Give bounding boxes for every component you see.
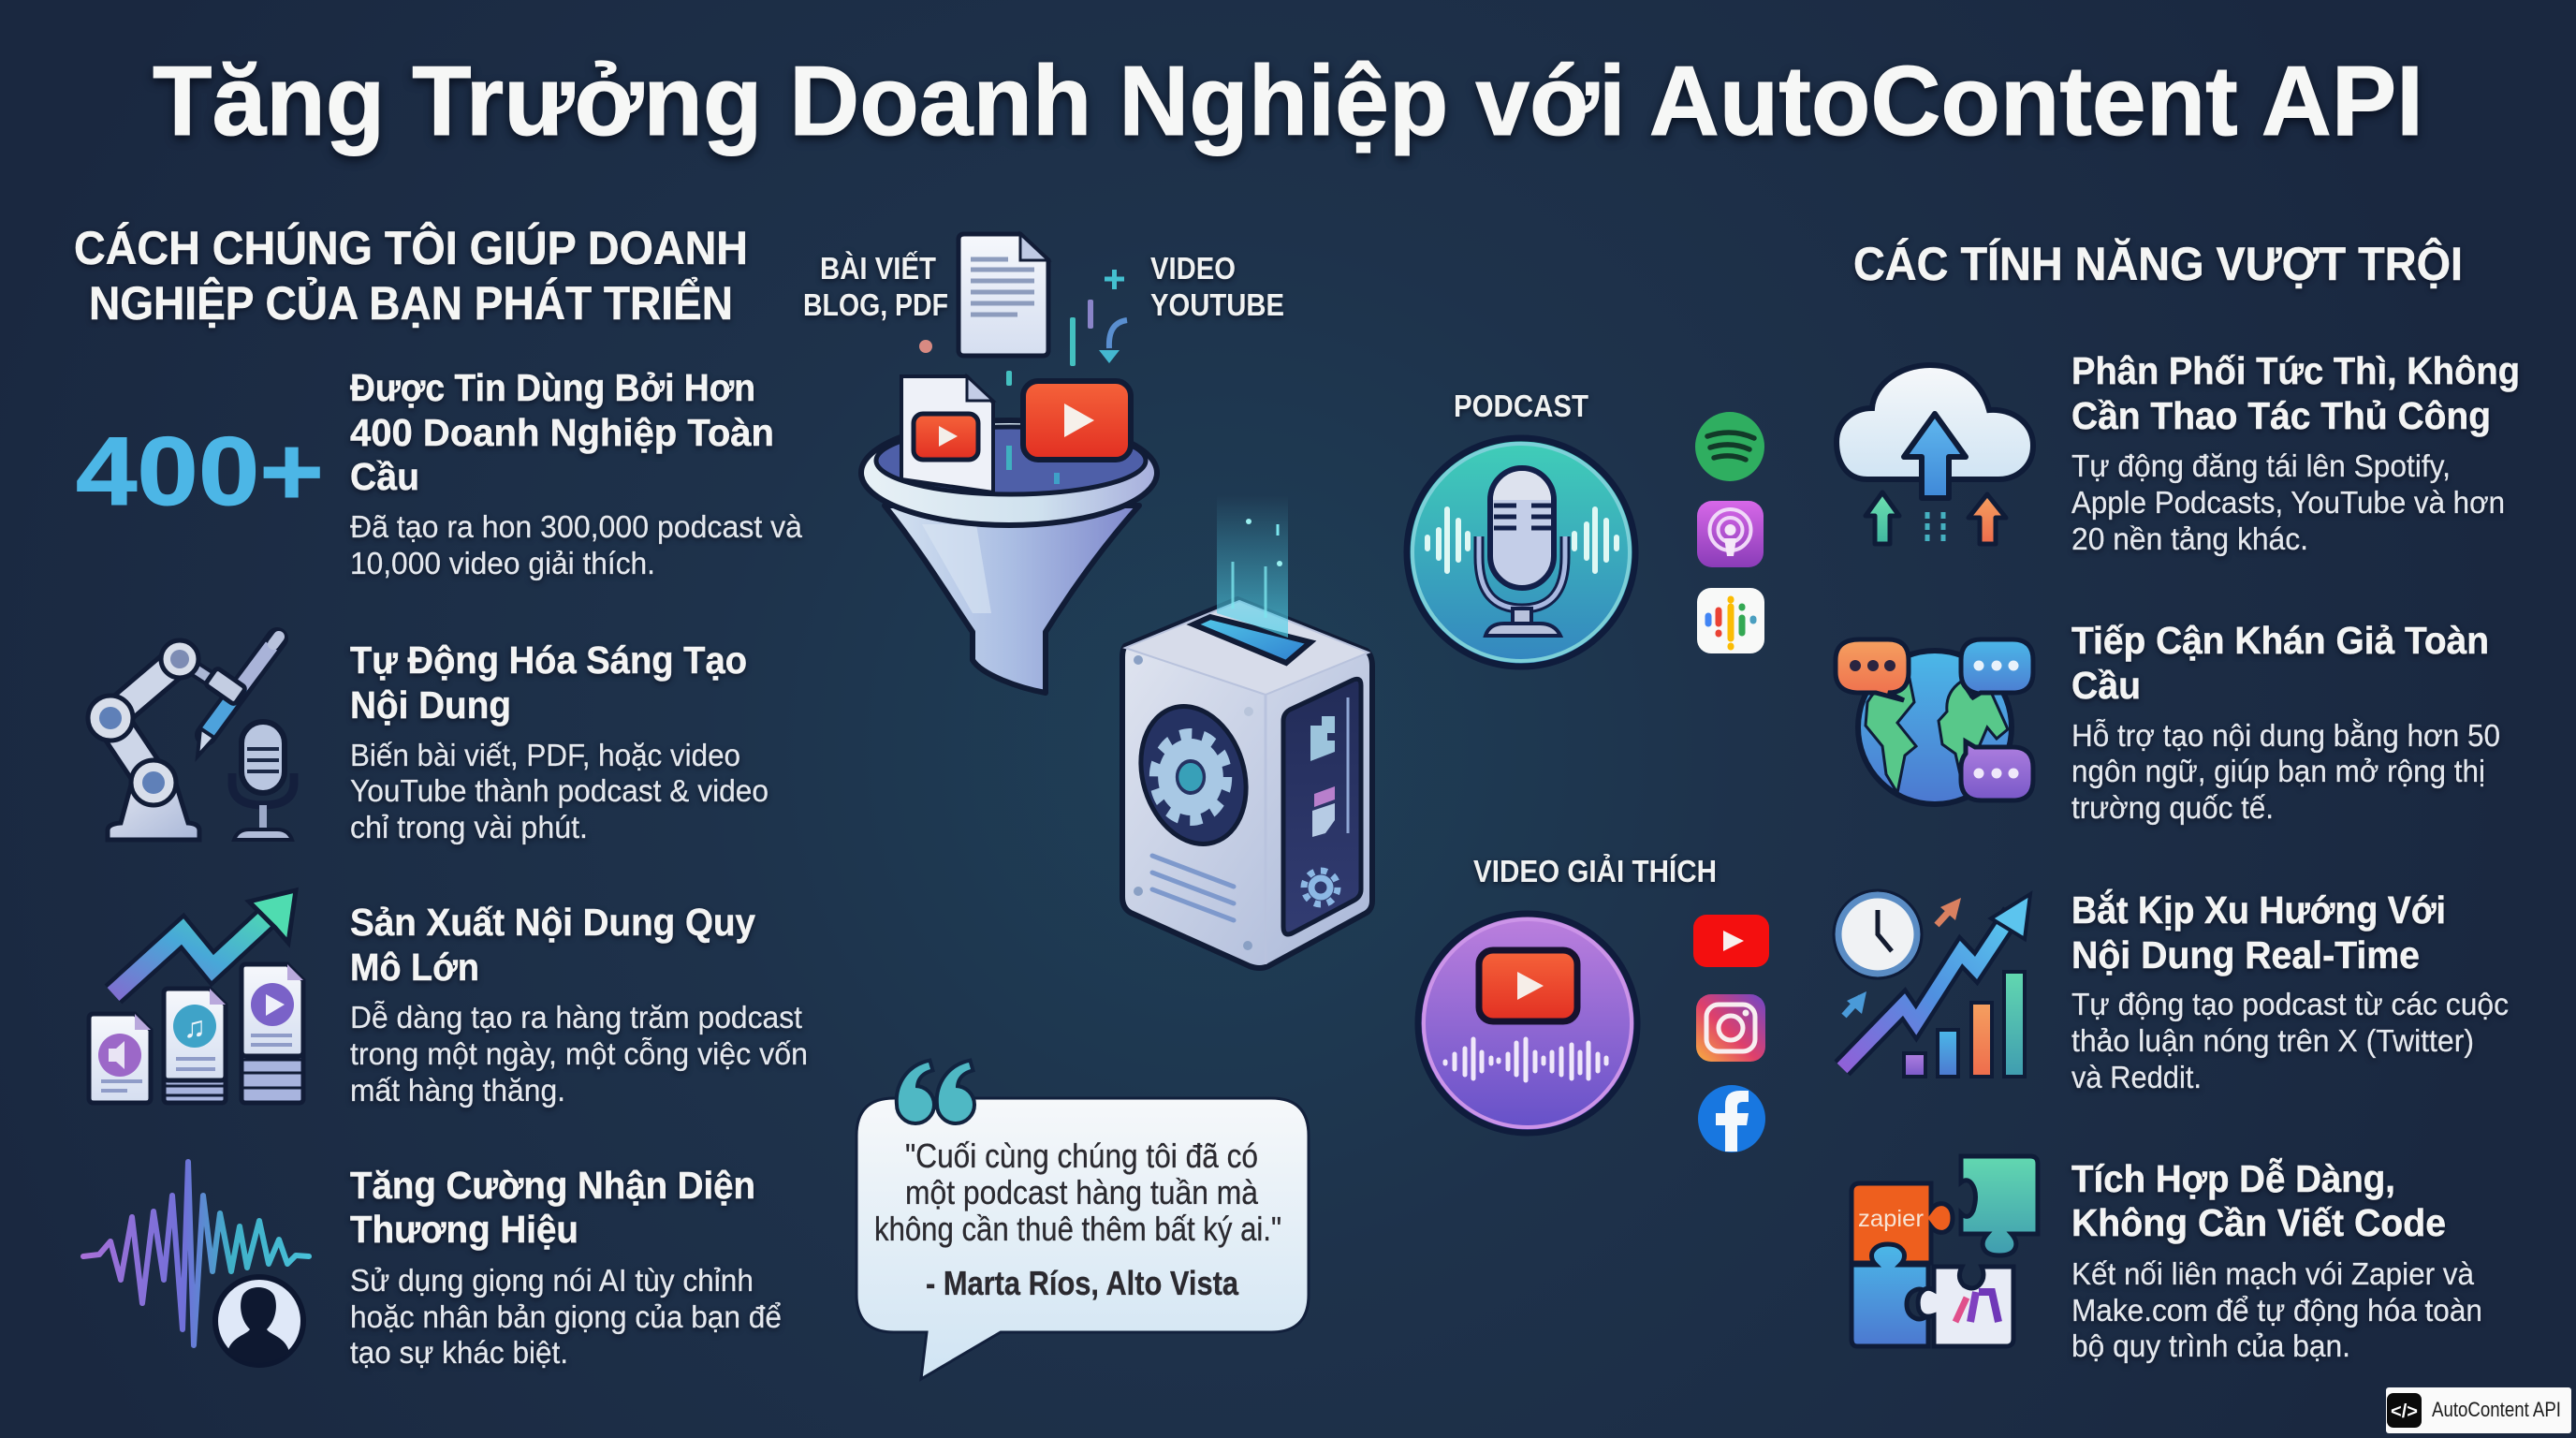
text block: global audience: Tiếp Cận Khán Giả Toàn	[2071, 619, 2489, 662]
label: blog and pdf input	[803, 251, 948, 322]
icon: apple podcasts	[1697, 501, 1764, 567]
text block: instant distribution	[2071, 349, 2520, 556]
text block: content automation: YouTube thành podcast & video	[350, 773, 768, 808]
left heading: CÁCH CHÚNG TÔI GIÚP DOANH	[74, 221, 748, 274]
quote text: không cần thuê thêm bất ký ai."	[874, 1210, 1281, 1248]
icon: growing documents with arrow: ♫	[183, 1010, 206, 1044]
text block: easy integration: Tích Hợp Dễ Dàng,	[2071, 1157, 2395, 1200]
icon: instagram	[1696, 994, 1765, 1062]
icon: voice waveform with avatar	[83, 1162, 309, 1365]
label: youtube video input	[1150, 251, 1284, 322]
text block: large-scale production: Sản Xuất Nội Dung Quy	[350, 901, 755, 944]
title: Tăng Trưởng Doanh Nghiệp với AutoContent API	[153, 46, 2423, 156]
label: youtube video input: YOUTUBE	[1150, 287, 1284, 322]
text block: trusted by 400 businesses: Đã tạo ra hon 300,000 podcast và	[350, 509, 803, 544]
text block: real-time trends: và Reddit.	[2071, 1060, 2202, 1094]
text block: global audience: Cầu	[2071, 664, 2141, 707]
icon: globe with speech bubbles	[1836, 639, 2033, 804]
text block: content automation: Tự Động Hóa Sáng Tạo	[350, 638, 747, 682]
icon: quote marks	[899, 1063, 973, 1122]
icon: robot arm with pen and microphone	[88, 637, 294, 840]
text block: brand recognition: Sử dụng giọng nói AI tùy chỉnh	[350, 1263, 754, 1298]
text block: global audience: Hỗ trợ tạo nội dung bằng hơn 50	[2071, 718, 2500, 753]
icon: processing machine with beam	[1122, 495, 1372, 968]
label: youtube video input: VIDEO	[1150, 251, 1236, 286]
text block: brand recognition	[350, 1164, 782, 1370]
text block: easy integration: Make.com để tự động hóa toàn	[2071, 1293, 2482, 1328]
stat: 400+: 400+	[76, 418, 324, 526]
text block: content automation	[350, 638, 768, 844]
text block: trusted by 400 businesses: 400 Doanh Nghiệp Toàn	[350, 411, 774, 454]
icon: trend chart with clock	[1834, 890, 2030, 1077]
right heading: CÁC TÍNH NĂNG VƯỢT TRỘI	[1853, 237, 2463, 290]
text block: trusted by 400 businesses	[350, 366, 803, 580]
text block: real-time trends: Bắt Kịp Xu Hướng Với	[2071, 888, 2446, 932]
text block: easy integration: Không Cần Viết Code	[2071, 1201, 2446, 1244]
text block: large-scale production	[350, 901, 808, 1108]
footer badge: AutoContent API	[2386, 1387, 2571, 1433]
text block: content automation: Biến bài viết, PDF, hoặc video	[350, 738, 740, 772]
panel: center workflow	[803, 234, 1769, 1379]
text block: instant distribution: 20 nền tảng khác.	[2071, 521, 2308, 556]
icon: cloud upload	[1837, 365, 2033, 544]
quote text	[874, 1137, 1281, 1302]
text block: brand recognition: Thương Hiệu	[350, 1208, 578, 1251]
icon: integration puzzle pieces: zapier	[1858, 1206, 1924, 1232]
label: blog and pdf input: BLOG, PDF	[803, 287, 948, 322]
text block: global audience: trường quốc tế.	[2071, 790, 2274, 825]
left heading: NGHIỆP CỦA BẠN PHÁT TRIỂN	[89, 276, 733, 330]
footer badge: AutoContent API: </>	[2391, 1401, 2418, 1422]
label: explainer video output: VIDEO GIẢI THÍCH	[1473, 854, 1717, 888]
quote text: một podcast hàng tuần mà	[905, 1173, 1259, 1211]
text block: instant distribution: Tự động đăng tái lên Spotify,	[2071, 448, 2451, 483]
icon: youtube	[1693, 915, 1769, 967]
text block: real-time trends	[2071, 888, 2509, 1094]
label: podcast output: PODCAST	[1454, 389, 1588, 423]
callout: customer quote	[856, 1063, 1309, 1379]
label: blog and pdf input: BÀI VIẾT	[820, 251, 936, 286]
text block: real-time trends: thảo luận nóng trên X (Twitter)	[2071, 1023, 2474, 1058]
decorative particles and curved arrow	[919, 270, 1127, 386]
text block: instant distribution: Apple Podcasts, YouTube và hơn	[2071, 485, 2505, 520]
text block: global audience: ngôn ngữ, giúp bạn mở rộng thị	[2071, 754, 2485, 788]
text block: brand recognition: Tăng Cường Nhận Diện	[350, 1164, 755, 1207]
text block: large-scale production: Dễ dàng tạo ra hàng trăm podcast	[350, 1000, 802, 1034]
text block: instant distribution: Cần Thao Tác Thủ Công	[2071, 394, 2491, 437]
text block: trusted by 400 businesses: 10,000 video giải thích.	[350, 546, 655, 580]
icon: spotify	[1695, 412, 1764, 481]
icon: podcast microphone badge	[1407, 438, 1635, 667]
icon: integration puzzle pieces	[1852, 1156, 2038, 1346]
text block: large-scale production: trong một ngày, một cỗng việc vốn	[350, 1036, 808, 1071]
text block: large-scale production: Mô Lớn	[350, 946, 479, 989]
text block: large-scale production: mất hàng thăng.	[350, 1073, 565, 1108]
text block: easy integration	[2071, 1157, 2482, 1363]
text block: brand recognition: hoặc nhân bản giọng của bạn để	[350, 1299, 782, 1334]
panel: right column features	[1834, 237, 2520, 1363]
icon: growing documents with arrow	[89, 890, 303, 1103]
panel: left column benefits	[74, 221, 808, 1370]
text block: real-time trends: Tự động tạo podcast từ các cuộc	[2071, 987, 2509, 1021]
text block: global audience	[2071, 619, 2500, 825]
text block: trusted by 400 businesses: Cầu	[350, 455, 419, 498]
icon: document	[959, 234, 1048, 356]
icon: explainer video badge	[1418, 914, 1637, 1133]
text block: easy integration: bộ quy trình của bạn.	[2071, 1328, 2350, 1363]
text block: brand recognition: tạo sự khác biệt.	[350, 1335, 568, 1370]
quote text: - Marta Ríos, Alto Vista	[926, 1264, 1239, 1302]
icon: facebook	[1698, 1085, 1765, 1152]
text block: content automation: Nội Dung	[350, 683, 511, 726]
text block: real-time trends: Nội Dung Real-Time	[2071, 933, 2420, 976]
text block: instant distribution: Phân Phối Tức Thì, Không	[2071, 349, 2520, 392]
text block: trusted by 400 businesses: Được Tin Dùng Bởi Hơn	[350, 366, 755, 409]
quote text: "Cuối cùng chúng tôi đã có	[905, 1137, 1258, 1175]
text block: easy integration: Kết nối liên mạch vói Zapier và	[2071, 1256, 2475, 1291]
text block: content automation: chỉ trong vài phút.	[350, 810, 588, 844]
icon: funnel	[861, 376, 1157, 693]
left heading	[74, 221, 748, 330]
icon: google podcasts	[1697, 588, 1764, 653]
